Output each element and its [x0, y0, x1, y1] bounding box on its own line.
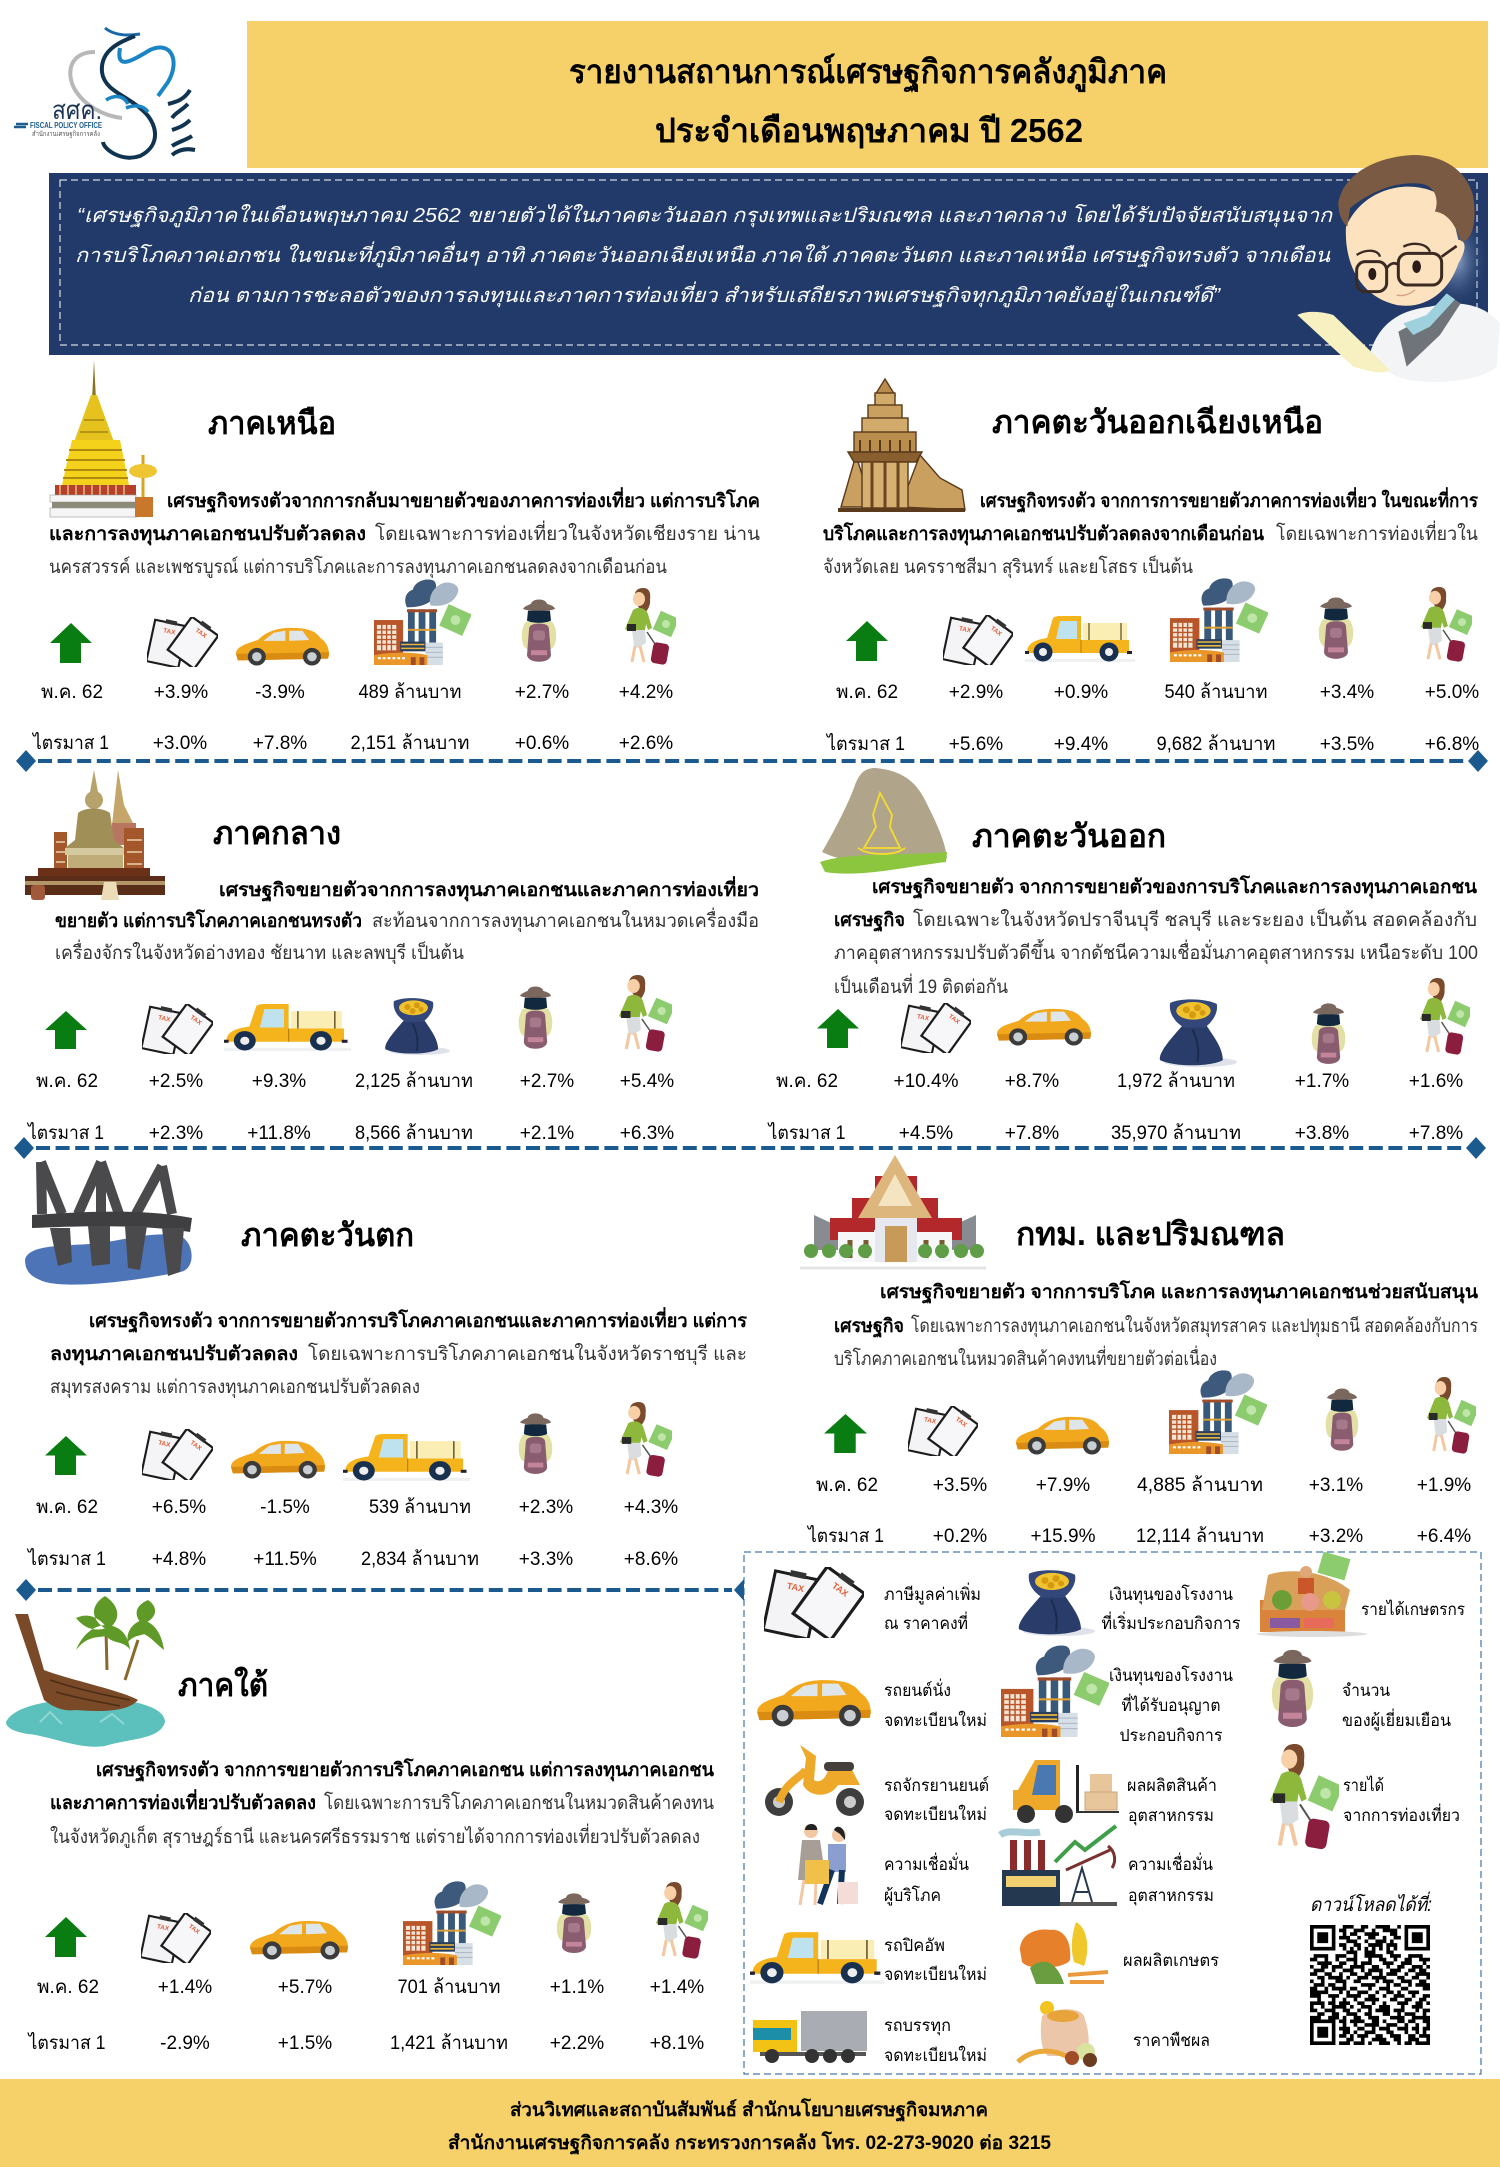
icon: River Kwai bridge [25, 1162, 192, 1285]
stats: North: -3.9% [255, 682, 305, 703]
stats: Northeast: +3.4% [1320, 682, 1374, 703]
stats: Bangkok: +3.1% [1309, 1475, 1363, 1496]
legend: truck: รถบรรทุก [884, 2016, 951, 2036]
stats: South: 701 ล้านบาท [398, 1977, 500, 1998]
icon: Marble Temple [800, 1155, 986, 1268]
title: ประจำเดือนพฤษภาคม ปี 2562 [655, 112, 1083, 149]
stats: Central: 8,566 ล้านบาท [355, 1123, 473, 1144]
stats: Central: +6.3% [620, 1123, 674, 1144]
stats: South: -2.9% [160, 2033, 210, 2054]
legend: crop prices: ราคาพืชผล [1133, 2031, 1210, 2050]
stats: Central: +2.7% [520, 1071, 574, 1092]
legend: capital of licensed factories: ที่ได้รับอนุญาต [1122, 1693, 1220, 1716]
panel: summary quote: ก่อน ตามการชะลอตัวของการลงทุนและภาคการท่องเที่ยว สำหรับเสถียรภาพเศรษฐกิจทุกภูมิภาคยังอยู่ในเกณฑ์ดี” [188, 281, 1221, 308]
stats: East: +10.4% [894, 1071, 959, 1092]
icon row: East [817, 978, 1473, 1067]
title: รายงานสถานการณ์เศรษฐกิจการคลังภูมิภาค [569, 53, 1167, 93]
stats: North: พ.ค. 62 [41, 682, 103, 703]
text block: Central summary: ขยายตัว แต่การบริโภคภาคเอกชนทรงตัว [55, 909, 362, 932]
download label: ดาวน์โหลดได้ที่: [1310, 1891, 1432, 1916]
panel: Northeast [823, 379, 1479, 755]
text block: East summary: เป็นเดือนที่ 19 ติดต่อกัน [834, 973, 1008, 998]
stats: Central: ไตรมาส 1 [26, 1122, 104, 1144]
illustration: doctor reading paper [1297, 155, 1500, 382]
divider 2 [14, 1137, 1486, 1159]
stats: North: +3.0% [153, 733, 207, 754]
panel: South [6, 1596, 714, 2054]
stats: North: +0.6% [515, 733, 569, 754]
text block: South summary [50, 1758, 714, 1849]
legend: number of visitors: จำนวน [1342, 1681, 1390, 1700]
legend: motorcycle: จดทะเบียนใหม่ [884, 1804, 987, 1824]
legend: farmer income [1257, 1552, 1465, 1637]
icon row: Central [45, 975, 675, 1056]
stats: Central [26, 1071, 674, 1144]
stats: West: -1.5% [260, 1497, 310, 1518]
icon: Buddha carved on rock [820, 768, 947, 874]
stats: South: 1,421 ล้านบาท [390, 2033, 508, 2054]
text block: South summary: โดยเฉพาะการบริโภคภาคเอกชนในหมวดสินค้าคงทน [324, 1791, 714, 1814]
stats: Bangkok: 4,885 ล้านบาท [1137, 1475, 1263, 1496]
text block: Central summary [55, 876, 759, 965]
text block: East summary: เศรษฐกิจขยายตัว จากการขยายตัวของการบริโภคและการลงทุนภาคเอกชน [872, 875, 1477, 900]
stats: South: +1.5% [278, 2033, 332, 2054]
legend: consumer confidence: ความเชื่อมั่น [884, 1852, 969, 1874]
text block: West summary: โดยเฉพาะการบริโภคภาคเอกชนในจังหวัดราชบุรี และ [308, 1342, 747, 1366]
stats: Bangkok: +15.9% [1031, 1526, 1096, 1547]
stats: West: +4.3% [624, 1497, 678, 1518]
stats: Northeast: +2.9% [949, 682, 1003, 703]
divider 3 [16, 1579, 754, 1601]
stats: West: พ.ค. 62 [36, 1497, 98, 1518]
panel: West [25, 1162, 748, 1570]
text block: South summary: เศรษฐกิจทรงตัว จากการขยายตัวการบริโภคภาคเอกชน แต่การลงทุนภาคเอกชน [96, 1758, 714, 1783]
footer banner: ส่วนวิเทศและสถาบันสัมพันธ์ สำนักนโยบายเศรษฐกิจมหภาค [510, 2098, 988, 2123]
legend: VAT [763, 1563, 981, 1641]
heading: Central: ภาคกลาง [213, 815, 341, 851]
stats: South: +1.1% [550, 1977, 604, 1998]
legend: motorcycle [765, 1745, 989, 1824]
stats: East [767, 1071, 1463, 1144]
text block: South summary: และภาคการท่องเที่ยวปรับตัวลดลง [50, 1789, 316, 1814]
text block: Bangkok summary [834, 1280, 1478, 1370]
icon row: South [45, 1881, 711, 1965]
legend: capital of licensed factories [1001, 1646, 1233, 1745]
legend: agricultural production: ผลผลิตเกษตร [1123, 1951, 1219, 1970]
stats: Northeast: ไตรมาส 1 [825, 733, 905, 755]
stats: Bangkok: +3.5% [933, 1475, 987, 1496]
panel: East [767, 768, 1478, 1144]
heading: North: ภาคเหนือ [208, 405, 336, 441]
stats: North: 489 ล้านบาท [358, 682, 462, 703]
stats: North: +7.8% [253, 733, 307, 754]
legend: passenger car: รถยนต์นั่ง [884, 1678, 951, 1700]
heading: Northeast: ภาคตะวันออกเฉียงเหนือ [992, 404, 1323, 440]
stats: East: +7.8% [1005, 1123, 1059, 1144]
icon row: North [50, 579, 679, 669]
stats: Bangkok [806, 1475, 1471, 1547]
stats: South: +8.1% [650, 2033, 704, 2054]
legend: industrial production: อุตสาหกรรม [1128, 1806, 1214, 1826]
text block: Northeast summary: จังหวัดเลย นครราชสีมา สุรินทร์ และยโสธร เป็นต้น [823, 554, 1193, 579]
stats: Northeast: +5.6% [949, 734, 1003, 755]
text block: South summary: ในจังหวัดภูเก็ต สุราษฎร์ธานี และนครศรีธรรมราช แต่รายได้จากการท่องเที่ยวปรับตัวลดลง [50, 1823, 700, 1849]
stats: Northeast: 9,682 ล้านบาท [1156, 734, 1276, 755]
text block: East summary: เศรษฐกิจ [834, 910, 905, 933]
text block: Bangkok summary: บริโภคภาคเอกชนในหมวดสินค้าคงทนที่ขยายตัวต่อเนื่อง [834, 1345, 1217, 1370]
legend: crop prices [1018, 2001, 1210, 2067]
stats: North: 2,151 ล้านบาท [350, 733, 470, 754]
stats: Northeast: +9.4% [1054, 734, 1108, 755]
legend: pickup: จดทะเบียนใหม่ [884, 1964, 987, 1984]
legend: number of visitors [1272, 1650, 1451, 1731]
legend: industrial confidence: อุตสาหกรรม [1128, 1886, 1214, 1906]
text block: North summary: เศรษฐกิจทรงตัวจากการกลับมาขยายตัวของภาคการท่องเที่ยว แต่การบริโภค [167, 487, 760, 514]
stats: North: ไตรมาส 1 [31, 732, 109, 754]
stats: Central: +2.3% [149, 1123, 203, 1144]
stats: Central: 2,125 ล้านบาท [355, 1071, 473, 1092]
text block: East summary: ภาคอุตสาหกรรมปรับตัวดีขึ้น จากดัชนีความเชื่อมั่นภาคอุตสาหกรรม เหนือระดับ 100 [834, 939, 1478, 965]
text block: West summary: ลงทุนภาคเอกชนปรับตัวลดลง [50, 1344, 298, 1366]
stats: East: +7.8% [1409, 1123, 1463, 1144]
legend: truck [753, 2011, 987, 2065]
stats: West: 539 ล้านบาท [369, 1497, 471, 1518]
stats: Central: +2.5% [149, 1071, 203, 1092]
text block: North summary [49, 487, 760, 579]
heading: South: ภาคใต้ [178, 1666, 268, 1703]
legend: passenger car: จดทะเบียนใหม่ [884, 1710, 987, 1730]
text block: Bangkok summary: เศรษฐกิจขยายตัว จากการบริโภค และการลงทุนภาคเอกชนช่วยสนับสนุน [880, 1280, 1478, 1305]
stats: Northeast: +0.9% [1054, 682, 1108, 703]
heading: East: ภาคตะวันออก [972, 818, 1166, 854]
stats: West: +2.3% [519, 1497, 573, 1518]
panel: summary quote: “เศรษฐกิจภูมิภาคในเดือนพฤษภาคม 2562 ขยายตัวได้ในภาคตะวันออก กรุงเทพและปริมณฑล และภาคกลาง โดยได้รับปัจจัยสนับสนุนจาก [77, 203, 1333, 228]
stats: North: +3.9% [154, 682, 208, 703]
text block: West summary: สมุทรสงคราม แต่การลงทุนภาคเอกชนปรับตัวลดลง [50, 1377, 420, 1399]
stats: South: +5.7% [278, 1977, 332, 1998]
stats: Bangkok: 12,114 ล้านบาท [1136, 1526, 1264, 1547]
stats: North: +2.6% [619, 733, 673, 754]
stats: Bangkok: +1.9% [1417, 1475, 1471, 1496]
stats: North: +2.7% [515, 682, 569, 703]
stats: Northeast: +6.8% [1425, 734, 1479, 755]
panel: summary quote [49, 173, 1488, 355]
stats: East: ไตรมาส 1 [767, 1122, 846, 1144]
legend: pickup: รถปิคอัพ [884, 1936, 945, 1955]
text block: Northeast summary: โดยเฉพาะการท่องเที่ยวใน [1276, 520, 1478, 545]
legend: passenger car [757, 1678, 987, 1730]
legend: farmer income: รายได้เกษตรกร [1361, 1599, 1465, 1619]
header banner [247, 21, 1488, 168]
logo: Fiscal Policy Office: สำนักงานเศรษฐกิจการคลัง [32, 130, 100, 138]
panel: Bangkok and vicinity [800, 1155, 1479, 1547]
text block: North summary: นครสวรรค์ และเพชรบูรณ์ แต่การบริโภคและการลงทุนภาคเอกชนลดลงจากเดือนก่อน [49, 555, 667, 579]
legend: industrial production [1013, 1760, 1217, 1826]
stats: Northeast: +3.5% [1320, 734, 1374, 755]
logo: Fiscal Policy Office [14, 28, 195, 158]
legend: agricultural production [1020, 1922, 1219, 1984]
stats: Central: +11.8% [247, 1123, 311, 1144]
legend: tourism income: จากการท่องเที่ยว [1343, 1803, 1460, 1825]
stats: Northeast [825, 682, 1479, 755]
stats: Bangkok: +6.4% [1417, 1526, 1471, 1547]
text block: North summary: และการลงทุนภาคเอกชนปรับตัวลดลง [49, 524, 366, 546]
legend: capital of licensed factories: ประกอบกิจการ [1120, 1726, 1222, 1745]
legend: tourism income: รายได้ [1343, 1775, 1384, 1795]
stats: West: +3.3% [519, 1549, 573, 1570]
legend: number of visitors: ของผู้เยี่ยมเยือน [1342, 1708, 1451, 1731]
legend: VAT: ณ ราคาคงที่ [884, 1611, 968, 1633]
stats: Central: พ.ค. 62 [36, 1071, 98, 1092]
panel: North [31, 360, 760, 754]
stats: West: +6.5% [152, 1497, 206, 1518]
stats: Central: +5.4% [620, 1071, 674, 1092]
stats: West: 2,834 ล้านบาท [361, 1549, 479, 1570]
QR code [1310, 1925, 1430, 2045]
stats: Northeast: +5.0% [1425, 682, 1479, 703]
text block: West summary [50, 1307, 748, 1399]
stats: East: +8.7% [1005, 1071, 1059, 1092]
stats: South [27, 1977, 704, 2054]
text block: Central summary: เครื่องจักรในจังหวัดอ่างทอง ชัยนาท และลพบุรี เป็นต้น [55, 939, 464, 965]
text block: North summary: โดยเฉพาะการท่องเที่ยวในจังหวัดเชียงราย น่าน [375, 520, 760, 545]
legend: VAT: ภาษีมูลค่าเพิ่ม [884, 1582, 981, 1605]
text block: Central summary: สะท้อนจากการลงทุนภาคเอกชนในหมวดเครื่องมือ [372, 907, 759, 933]
legend: industrial production: ผลผลิตสินค้า [1127, 1776, 1217, 1795]
text block: West summary: เศรษฐกิจทรงตัว จากการขยายตัวการบริโภคภาคเอกชนและภาคการท่องเที่ยว แต่การ [89, 1307, 748, 1334]
stats: Bangkok: +7.9% [1036, 1475, 1090, 1496]
stats: East: +4.5% [899, 1123, 953, 1144]
title [569, 53, 1167, 149]
text block: Bangkok summary: เศรษฐกิจ [834, 1316, 904, 1339]
heading: West: ภาคตะวันตก [241, 1217, 414, 1253]
panel: summary quote: การบริโภคภาคเอกชน ในขณะที่ภูมิภาคอื่นๆ อาทิ ภาคตะวันออกเฉียงเหนือ ภาคใต้ ภาคตะวันตก และภาคเหนือ เศรษฐกิจทรงตัว จากเดือน [75, 241, 1331, 268]
icon: Phimai-style monument [838, 379, 965, 510]
icon row: West [45, 1402, 675, 1482]
stats: North [31, 682, 673, 754]
stats: South: +1.4% [158, 1977, 212, 1998]
text block: Northeast summary: บริโภคและการลงทุนภาคเอกชนปรับตัวลดลงจากเดือนก่อน [823, 522, 1264, 546]
stats: Northeast: พ.ค. 62 [836, 682, 898, 703]
stats: Central: +2.1% [520, 1123, 574, 1144]
legend: capital of factories starting operation: เงินทุนของโรงงาน [1109, 1584, 1233, 1605]
legend: consumer confidence [798, 1824, 969, 1906]
legend: industrial confidence: ความเชื่อมั่น [1128, 1852, 1213, 1874]
icon: long-tail boat and palm trees [6, 1596, 165, 1747]
icon: golden chedi [50, 360, 157, 517]
legend: motorcycle: รถจักรยานยนต์ [884, 1776, 989, 1795]
logo: Fiscal Policy Office: FISCAL POLICY OFFICE [30, 121, 103, 130]
stats: West: ไตรมาส 1 [26, 1548, 106, 1570]
icon: Buddha statue at Sukhothai [25, 770, 165, 900]
stats: South: +2.2% [550, 2033, 604, 2054]
stats: Bangkok: +0.2% [933, 1526, 987, 1547]
stats: Bangkok: ไตรมาส 1 [806, 1525, 884, 1547]
stats: North: +4.2% [619, 682, 673, 703]
stats: Northeast: 540 ล้านบาท [1164, 682, 1268, 703]
stats: West: +8.6% [624, 1549, 678, 1570]
legend: capital of factories starting operation [1019, 1570, 1240, 1636]
stats: West [26, 1497, 678, 1570]
heading: Bangkok and vicinity: กทม. และปริมณฑล [1016, 1216, 1285, 1252]
legend: capital of licensed factories: เงินทุนของโรงงาน [1109, 1665, 1233, 1686]
legend: pickup [750, 1932, 987, 1984]
logo: Fiscal Policy Office: สศค. [52, 95, 102, 125]
panel: legend [744, 1552, 1481, 2074]
legend: tourism income [1270, 1744, 1460, 1850]
divider 1 [16, 750, 1488, 772]
text block: East summary [834, 875, 1478, 998]
stats: South: ไตรมาส 1 [27, 2032, 105, 2054]
text block: Northeast summary [823, 487, 1479, 579]
stats: East: 35,970 ล้านบาท [1111, 1123, 1241, 1144]
icon row: Northeast [846, 578, 1475, 667]
legend: consumer confidence: ผู้บริโภค [884, 1885, 941, 1906]
icon row: Bangkok [824, 1370, 1479, 1458]
stats: East: พ.ค. 62 [776, 1071, 838, 1092]
stats: Central: +9.3% [252, 1071, 306, 1092]
legend: capital of factories starting operation: ที่เริ่มประกอบกิจการ [1102, 1611, 1240, 1633]
stats: East: 1,972 ล้านบาท [1117, 1071, 1235, 1092]
stats: East: +1.6% [1409, 1071, 1463, 1092]
text block: Central summary: เศรษฐกิจขยายตัวจากการลงทุนภาคเอกชนและภาคการท่องเที่ยว [219, 876, 759, 903]
stats: South: +1.4% [650, 1977, 704, 1998]
stats: Bangkok: พ.ค. 62 [816, 1475, 878, 1496]
legend: truck: จดทะเบียนใหม่ [884, 2045, 987, 2065]
text block: East summary: โดยเฉพาะในจังหวัดปราจีนบุรี ชลบุรี และระยอง เป็นต้น สอดคล้องกับ [913, 907, 1477, 932]
stats: East: +1.7% [1295, 1071, 1349, 1092]
stats: West: +4.8% [152, 1549, 206, 1570]
stats: South: พ.ค. 62 [37, 1977, 99, 1998]
footer banner [0, 2079, 1500, 2167]
panel: Central [25, 770, 759, 1144]
legend: industrial confidence [1000, 1826, 1214, 1906]
stats: Bangkok: +3.2% [1309, 1526, 1363, 1547]
stats: East: +3.8% [1295, 1123, 1349, 1144]
footer banner: สำนักงานเศรษฐกิจการคลัง กระทรวงการคลัง โทร. 02-273-9020 ต่อ 3215 [448, 2131, 1051, 2156]
stats: West: +11.5% [253, 1549, 317, 1570]
